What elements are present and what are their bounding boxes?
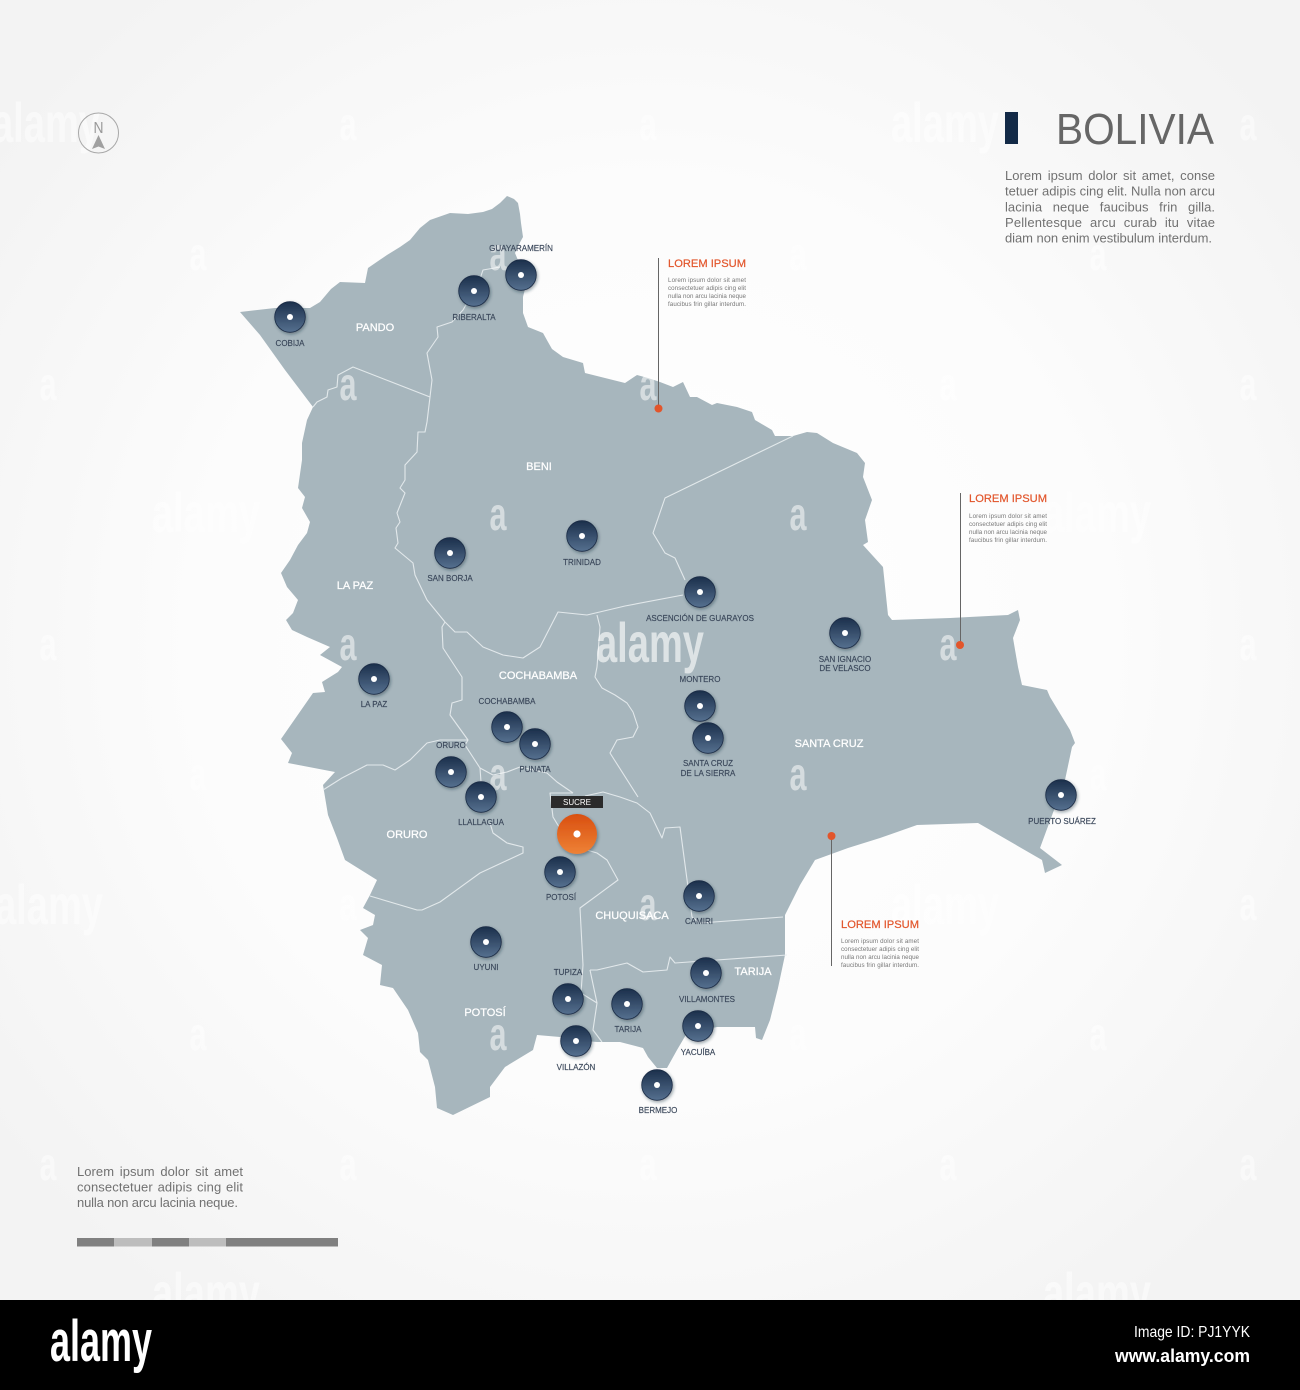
watermark pattern: a	[340, 358, 357, 410]
title: BOLIVIA	[1056, 105, 1215, 154]
watermark pattern: a	[40, 1138, 57, 1190]
callout: north: LOREM IPSUM	[668, 258, 746, 270]
stock photo footer bar: alamy	[50, 1309, 152, 1374]
city pin: Santa Cruz de la Sierra	[681, 723, 736, 778]
map of Bolivia	[240, 196, 1075, 1115]
callout: east: LOREM IPSUM	[969, 493, 1047, 505]
callout: south: LOREM IPSUM	[841, 919, 919, 931]
footnote text: Lorem ipsum dolor sit amet	[77, 1164, 243, 1179]
callout: north: nulla non arcu lacinia neque	[668, 293, 747, 300]
watermark pattern: a	[790, 1008, 807, 1060]
watermark pattern: a	[640, 878, 657, 930]
watermark pattern: a	[640, 358, 657, 410]
region names	[337, 322, 864, 1019]
city pin: Tarija: TARIJA	[615, 1025, 642, 1034]
city pin: Oruro	[436, 741, 466, 787]
watermark pattern: a	[940, 1138, 957, 1190]
watermark pattern: alamy	[152, 1261, 260, 1324]
watermark pattern: a	[190, 748, 207, 800]
callout: east	[956, 493, 1048, 649]
city pin: Camiri: CAMIRI	[685, 917, 713, 926]
callout: north: Lorem ipsum dolor sit amet	[668, 277, 746, 284]
watermark pattern: a	[190, 1008, 207, 1060]
watermark pattern: a	[940, 618, 957, 670]
city pin: Camiri	[684, 881, 714, 926]
callout: east: consectetuer adipis cing elit	[969, 521, 1047, 528]
city pin: Ascención de Guarayos	[646, 577, 754, 623]
city pin: Villamontes	[679, 958, 735, 1004]
city pin: Cobija	[275, 302, 305, 348]
city pin: Oruro: ORURO	[436, 741, 466, 750]
region names: LA PAZ	[337, 580, 374, 592]
callout: east: Lorem ipsum dolor sit amet	[969, 513, 1047, 520]
watermark pattern: a	[1240, 1138, 1257, 1190]
city pin: Bermejo: BERMEJO	[639, 1106, 677, 1115]
intro text: lacinia neque faucibus frin gilla.	[1005, 200, 1215, 214]
callout: south: nulla non arcu lacinia neque	[841, 954, 920, 961]
watermark pattern: a	[490, 228, 507, 280]
city pin: Riberalta	[452, 276, 496, 322]
region names: SANTA CRUZ	[795, 738, 864, 750]
city pin: Potosí: POTOSÍ	[546, 893, 577, 902]
city pin: Bermejo	[639, 1070, 677, 1115]
watermark pattern: a	[490, 488, 507, 540]
city pin: San Borja: SAN BORJA	[427, 574, 473, 583]
region names: BENI	[526, 461, 552, 473]
callout: north: consectetuer adipis cing elit	[668, 285, 746, 292]
watermark pattern: a	[1240, 98, 1257, 150]
city pin: Llallagua: LLALLAGUA	[458, 818, 505, 827]
watermark pattern: a	[940, 358, 957, 410]
city pin: Santa Cruz de la Sierra: SANTA CRUZ	[683, 759, 733, 768]
callout: south: Lorem ipsum dolor sit amet	[841, 938, 919, 945]
intro text: diam non enim vestibulum interdum.	[1005, 230, 1212, 246]
region names: TARIJA	[734, 966, 772, 978]
city pin: La Paz: LA PAZ	[361, 700, 387, 709]
watermark pattern: a	[1240, 358, 1257, 410]
intro text	[1005, 168, 1215, 246]
watermark pattern: alamy	[891, 91, 999, 154]
city pin: Uyuni	[471, 927, 501, 972]
watermark pattern: alamy	[1043, 481, 1151, 544]
stock photo footer bar	[0, 1300, 1300, 1390]
city pin: Tupiza	[553, 968, 583, 1014]
city pin: Cobija: COBIJA	[276, 339, 305, 348]
watermark pattern: a	[1090, 228, 1107, 280]
city pin: La Paz	[359, 664, 389, 709]
watermark pattern: alamy	[152, 481, 260, 544]
watermark pattern: alamy	[1043, 1261, 1151, 1324]
city pin: Montero	[680, 675, 720, 721]
watermark pattern: a	[640, 98, 657, 150]
watermark pattern: a	[340, 878, 357, 930]
watermark pattern: a	[1090, 748, 1107, 800]
city pin: Tarija	[612, 989, 642, 1034]
capital pin: Sucre: SUCRE	[563, 798, 591, 807]
callout: north: faucibus frin gillar interdum.	[668, 301, 746, 308]
city pin: Villazón: VILLAZÓN	[557, 1063, 596, 1072]
callout: south: consectetuer adipis cing elit	[841, 946, 919, 953]
watermark pattern: a	[790, 228, 807, 280]
region names: CHUQUISACA	[595, 910, 669, 922]
watermark pattern: a	[790, 748, 807, 800]
city pin: Punata	[519, 729, 551, 774]
city pin: San Ignacio de Velasco: SAN IGNACIO	[819, 655, 871, 664]
city pin: Montero: MONTERO	[680, 675, 720, 684]
city pin: Villamontes: VILLAMONTES	[679, 995, 735, 1004]
watermark pattern: a	[790, 488, 807, 540]
city pin: Llallagua	[458, 782, 505, 827]
title accent bar	[1005, 112, 1018, 144]
city pin: Guayaramerín	[489, 244, 553, 290]
watermark pattern: a	[490, 1008, 507, 1060]
city pin: Trinidad: TRINIDAD	[563, 558, 601, 567]
intro text: tetuer adipis cing elit. Nulla non arcu	[1005, 184, 1215, 198]
city pin: Yacuíba: YACUÍBA	[681, 1048, 716, 1057]
footnote text	[77, 1164, 243, 1210]
region names: POTOSÍ	[464, 1006, 507, 1019]
watermark pattern: a	[1240, 618, 1257, 670]
watermark pattern: a	[1090, 1008, 1107, 1060]
scale bar	[77, 1238, 338, 1246]
callout: east: nulla non arcu lacinia neque	[969, 529, 1048, 536]
city pin: Cochabamba	[479, 697, 536, 742]
city pin: Ascención de Guarayos: ASCENCIÓN DE GUARAYOS	[646, 614, 754, 623]
city pin: Yacuíba	[681, 1011, 716, 1057]
callout: south: faucibus frin gillar interdum.	[841, 962, 919, 969]
region names: ORURO	[387, 829, 428, 841]
city pin: Cochabamba: COCHABAMBA	[479, 697, 536, 706]
footnote text: nulla non arcu lacinia neque.	[77, 1195, 238, 1210]
stock photo footer bar: Image ID: PJ1YYK	[1134, 1324, 1250, 1341]
intro text: Pellentesque arcu curab itu vitae	[1005, 215, 1215, 230]
city pin: Villazón	[557, 1026, 596, 1072]
country outline	[240, 196, 1075, 1115]
stock photo footer bar: www.alamy.com	[1114, 1346, 1250, 1366]
watermark pattern: a	[490, 748, 507, 800]
watermark pattern: a	[340, 618, 357, 670]
callout: east: faucibus frin gillar interdum.	[969, 537, 1047, 544]
department borders	[313, 267, 793, 1042]
icon: compass	[78, 113, 118, 153]
watermark pattern: a	[340, 1138, 357, 1190]
city pin: Uyuni: UYUNI	[474, 963, 498, 972]
city pin: Puerto Suárez	[1028, 780, 1096, 826]
watermark pattern: alamy	[891, 873, 999, 936]
watermark pattern: a	[40, 618, 57, 670]
city pin: Tupiza: TUPIZA	[554, 968, 583, 977]
watermark pattern: alamy	[596, 611, 704, 674]
icon: compass: N	[94, 120, 104, 137]
city pin: Guayaramerín: GUAYARAMERÍN	[489, 244, 553, 253]
region names: PANDO	[356, 322, 395, 334]
watermark pattern: a	[1240, 878, 1257, 930]
watermark pattern: a	[40, 358, 57, 410]
watermark pattern: a	[640, 1138, 657, 1190]
watermark pattern: a	[340, 98, 357, 150]
city pin: Punata: PUNATA	[519, 765, 551, 774]
intro text: Lorem ipsum dolor sit amet, conse	[1005, 168, 1215, 183]
footnote text: consectetuer adipis cing elit	[77, 1180, 243, 1194]
callout: north	[654, 258, 747, 412]
city pin: Puerto Suárez: PUERTO SUÁREZ	[1028, 817, 1096, 826]
city pin: Potosí	[545, 857, 577, 902]
region names: COCHABAMBA	[499, 670, 578, 682]
city pin: San Ignacio de Velasco	[819, 618, 871, 673]
watermark pattern: a	[190, 228, 207, 280]
city pin: Santa Cruz de la Sierra: DE LA SIERRA	[681, 769, 736, 778]
capital pin: Sucre	[551, 796, 603, 854]
city pin: San Ignacio de Velasco: DE VELASCO	[819, 664, 871, 673]
callout: south	[828, 832, 920, 969]
city pin: Trinidad	[563, 521, 601, 567]
city pin: San Borja	[427, 538, 473, 583]
city pin: Riberalta: RIBERALTA	[452, 313, 496, 322]
